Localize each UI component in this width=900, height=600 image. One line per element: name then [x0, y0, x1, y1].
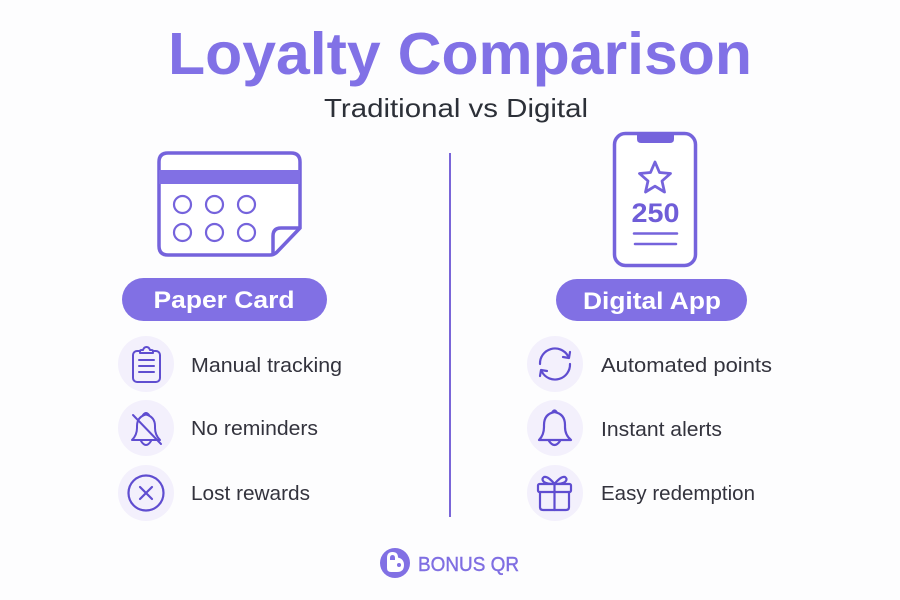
icon: logo mark [380, 548, 410, 578]
row: Instant alerts: Instant alerts [601, 418, 722, 441]
title: Loyalty Comparison [168, 21, 752, 87]
icon: smartphone with points: 250 [632, 198, 680, 228]
panel: digital app [527, 134, 772, 521]
icon: paper loyalty card [159, 153, 300, 255]
row: Automated points: Automated points [601, 354, 772, 377]
subtitle: Traditional vs Digital [324, 93, 588, 123]
row: Lost rewards [118, 465, 310, 521]
label pill: Digital App: Digital App [583, 288, 721, 315]
row: Easy redemption [527, 465, 755, 521]
row: Easy redemption: Easy redemption [601, 482, 755, 505]
row: Automated points [527, 336, 772, 392]
label pill: Digital App [556, 279, 747, 321]
panel: paper card [118, 153, 342, 521]
center divider [449, 153, 451, 517]
label pill: Paper Card: Paper Card [154, 287, 294, 314]
row: Instant alerts [527, 400, 722, 456]
icon: smartphone with points [614, 134, 696, 266]
row: No reminders: No reminders [191, 417, 318, 440]
logo: BONUS QR [380, 548, 519, 578]
label pill: Paper Card [122, 278, 327, 321]
row: Lost rewards: Lost rewards [191, 482, 310, 505]
logo: BONUS QR: BONUS QR [418, 554, 519, 576]
row: No reminders [118, 400, 318, 456]
row: Manual tracking [118, 336, 342, 392]
row: Manual tracking: Manual tracking [191, 354, 342, 377]
